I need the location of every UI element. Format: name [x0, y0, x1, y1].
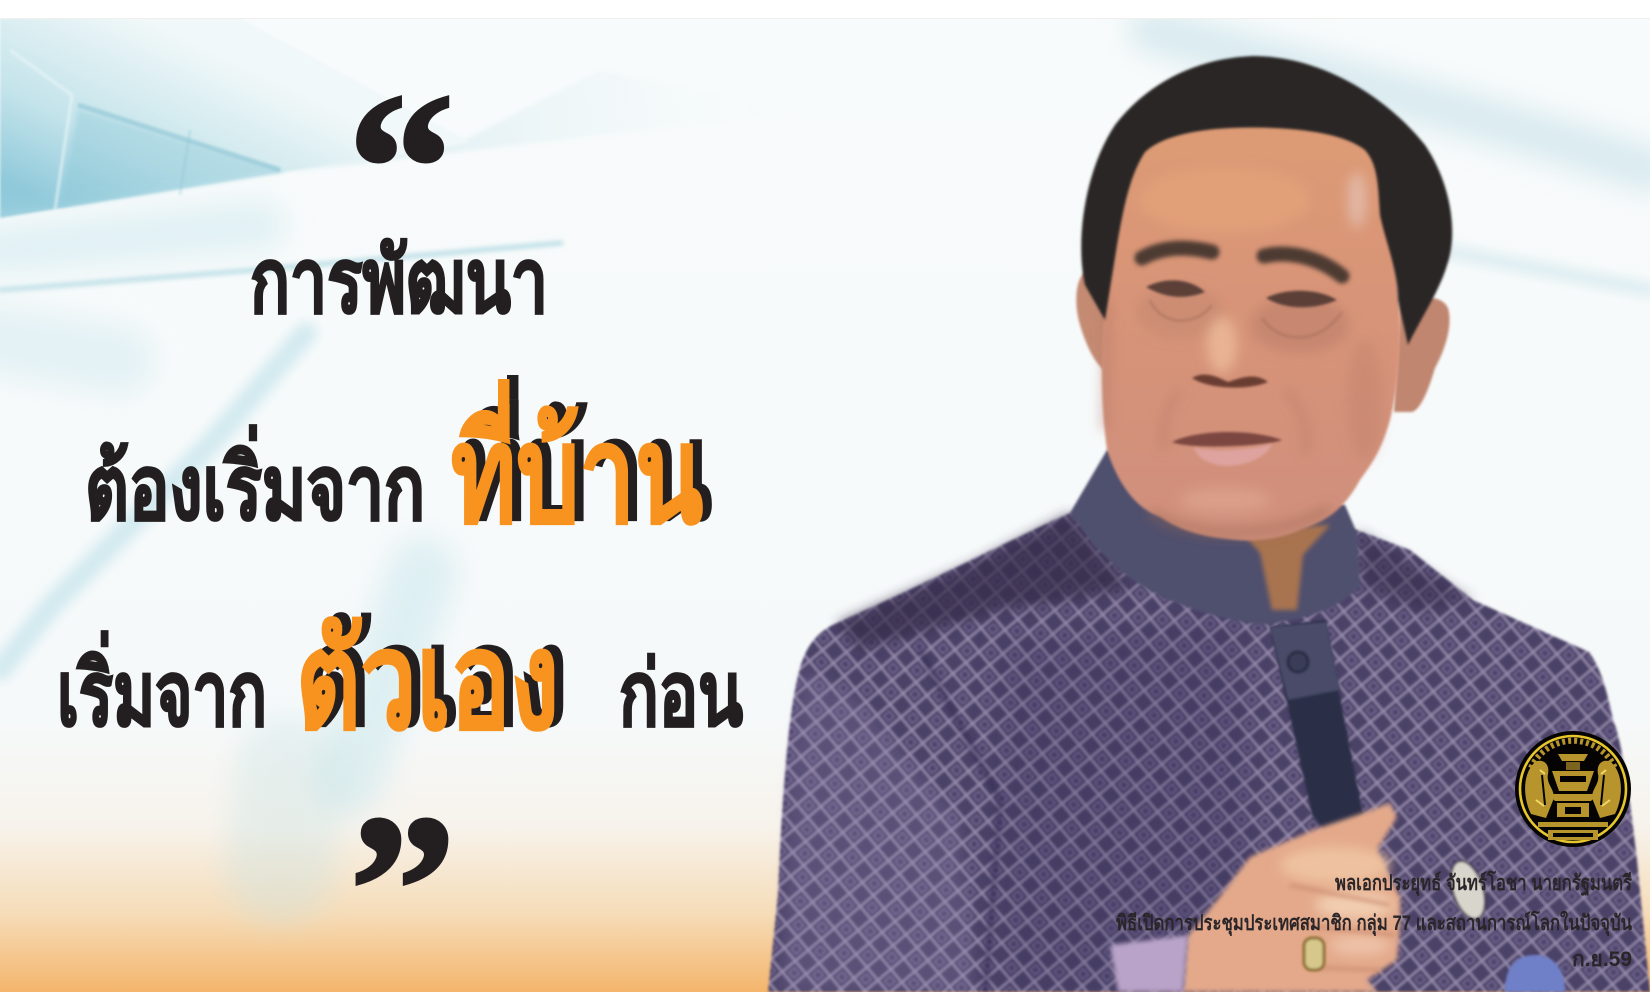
highlight shadow: oneself: ตัวเอง: [305, 601, 568, 753]
highlight: home: ที่บ้าน: [451, 379, 703, 551]
word: first: ก่อน: [619, 645, 743, 745]
mouth: [1172, 432, 1282, 466]
icon: government seal: [1515, 731, 1631, 847]
eyebrows: [1142, 248, 1342, 276]
highlight: oneself: ตัวเอง: [296, 605, 559, 757]
headline: line 2: ต้องเริ่มจาก: [85, 425, 425, 539]
neck: [1240, 525, 1330, 610]
under-eye creases: [1150, 300, 1342, 338]
collar: [1070, 450, 1360, 625]
quote mark: opening: “: [347, 48, 455, 287]
caption: date: ก.ย.59: [1572, 948, 1632, 971]
portrait: speaker: [768, 56, 1650, 992]
highlight shadow: home: ที่บ้าน: [460, 375, 712, 547]
blue badge: [1505, 955, 1565, 992]
face shading: [1105, 168, 1383, 533]
headline: line 1: การพัฒนา: [250, 232, 548, 332]
caption: [1116, 870, 1633, 971]
face: [1102, 100, 1400, 540]
headline: line 2: [85, 375, 712, 551]
hair: [1081, 56, 1452, 345]
seal: flame arc: [1531, 741, 1615, 768]
nose: [1192, 375, 1268, 388]
sleeve cuff: [1110, 935, 1188, 992]
ring: [1304, 938, 1324, 970]
ears: [1076, 272, 1450, 412]
jacket: [768, 513, 1650, 992]
background: building ceiling: [0, 19, 579, 220]
headline: line 3: [57, 601, 743, 757]
headline: line 3: เริ่มจาก: [57, 631, 267, 745]
placket and button: [1270, 620, 1363, 845]
eyes: [1146, 280, 1337, 307]
lapel pin: [1444, 857, 1492, 923]
hand: [1183, 803, 1400, 992]
